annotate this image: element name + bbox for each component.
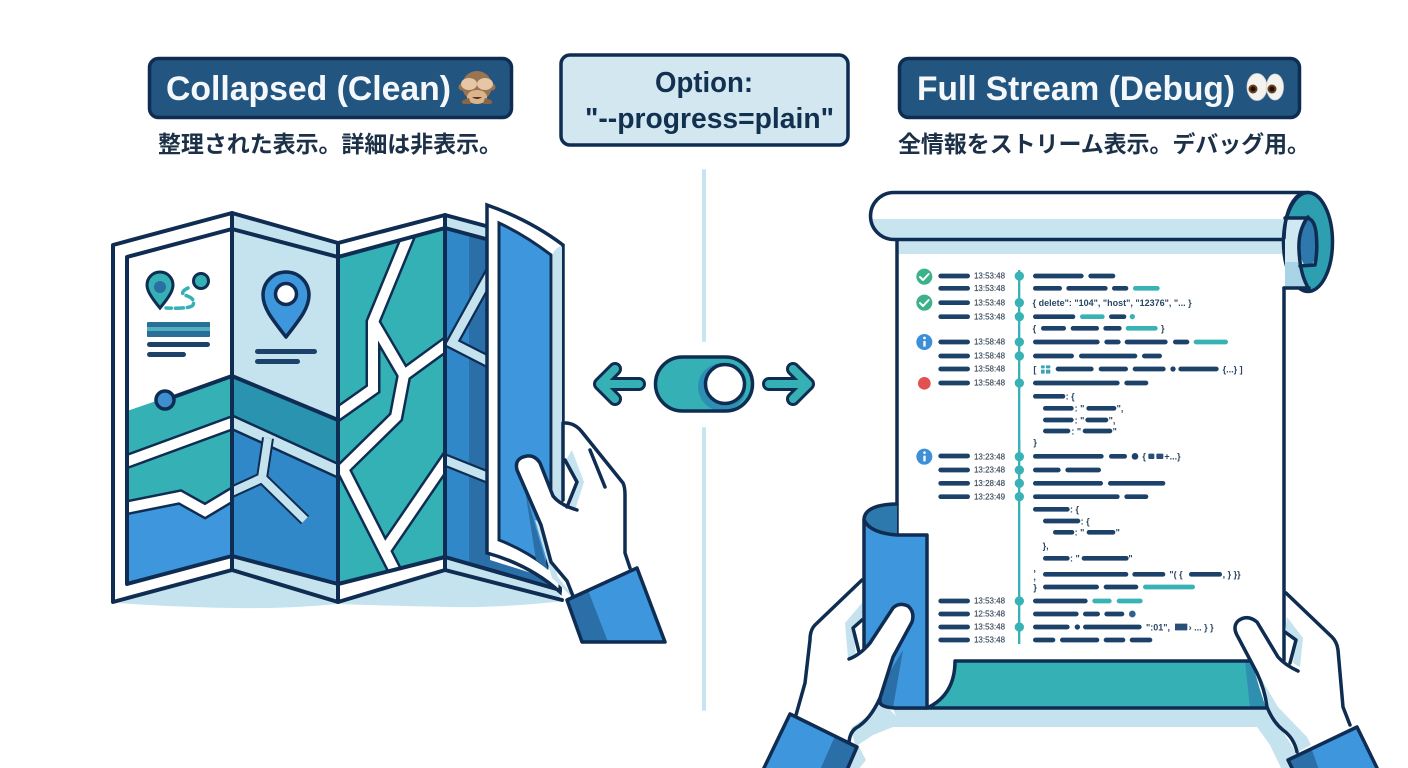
roll end	[1284, 192, 1332, 292]
scroll paper	[897, 238, 1283, 708]
log lines	[1033, 276, 1243, 448]
log lines: : {	[1081, 516, 1090, 526]
left finger shadow	[845, 603, 862, 658]
scroll bottom shadow	[893, 708, 1272, 727]
log lines: : {	[1070, 505, 1079, 515]
left hand	[796, 580, 913, 745]
log lines	[1033, 452, 1241, 640]
log lines: +...}	[1164, 452, 1181, 462]
map panel 2	[234, 232, 336, 582]
map pin small	[147, 272, 208, 308]
arrow: left	[600, 369, 639, 399]
timeline rail	[1015, 270, 1024, 460]
scroll illustration	[763, 192, 1378, 768]
log lines: ",	[1109, 415, 1115, 425]
log lines: {	[1142, 452, 1146, 462]
log lines: "	[1113, 426, 1117, 436]
subtitle: full stream description: 全情報をストリーム表示。デバッグ用。	[898, 131, 1310, 157]
sleeve left panel	[567, 568, 665, 642]
hand holding fold	[516, 423, 630, 600]
log lines: "( {	[1169, 570, 1183, 580]
log lines: { delete": "104", "host", "12376", "... }	[1033, 298, 1192, 308]
map pin large	[263, 272, 309, 337]
arrow: right	[769, 369, 808, 399]
toggle switch	[656, 357, 752, 411]
status icon: success	[916, 269, 932, 285]
left sleeve	[763, 714, 857, 768]
timestamps: 13:23:48	[974, 452, 1006, 461]
log lines: ",	[1117, 404, 1123, 414]
map panel 4	[447, 230, 490, 568]
timestamps: 13:23:48	[974, 466, 1006, 475]
top roll body	[870, 192, 1308, 254]
left paper curl	[864, 504, 927, 708]
fold flap	[487, 205, 563, 592]
map location dot	[156, 391, 174, 409]
finger shadow	[566, 450, 584, 510]
folded map illustration	[113, 205, 665, 642]
log content: lower	[916, 440, 1241, 645]
log lines: ,	[1033, 572, 1036, 582]
center divider	[702, 169, 706, 711]
log lines: },	[1043, 541, 1049, 551]
log lines: "	[1116, 528, 1120, 538]
header label: Full Stream (Debug): Full Stream (Debug)	[917, 70, 1235, 108]
status icon: success	[916, 295, 932, 311]
header label: Collapsed (Clean): Collapsed (Clean)	[166, 70, 451, 108]
timestamps: 13:53:48	[974, 623, 1006, 632]
map legend lines left	[147, 322, 210, 357]
status icon: error	[918, 377, 931, 390]
header: Full Stream (Debug)	[900, 58, 1300, 118]
timestamps: 12:53:48	[974, 610, 1006, 619]
bottom roll band	[895, 661, 1268, 708]
map ground shadow	[118, 570, 565, 608]
timestamps: 13:53:48	[974, 298, 1006, 307]
map panel 3	[340, 230, 443, 582]
timestamps: 13:53:48	[974, 272, 1006, 281]
log lines: : "	[1071, 426, 1081, 436]
option box	[561, 55, 848, 145]
log lines: , } }}	[1223, 570, 1241, 580]
icon: see-no-evil monkey	[458, 71, 496, 104]
log lines: ":01",	[1146, 622, 1170, 632]
timestamps: 13:23:49	[974, 492, 1006, 501]
log lines: {	[1033, 324, 1037, 334]
log lines: › ... } }	[1189, 622, 1214, 632]
map legend lines center	[255, 349, 317, 364]
log lines: : {	[1066, 392, 1075, 402]
log lines: }	[1161, 324, 1165, 334]
right sleeve	[1288, 727, 1378, 768]
timestamps: 13:53:48	[974, 312, 1006, 321]
timestamps: 13:58:48	[974, 352, 1006, 361]
timestamps: 13:58:48	[974, 338, 1006, 347]
log lines: ,	[1033, 564, 1036, 574]
log lines: : "	[1075, 415, 1084, 425]
right hand	[1235, 593, 1350, 752]
map lower fold shade	[490, 560, 562, 592]
log lines: }	[1033, 582, 1037, 592]
log lines: : "	[1070, 554, 1080, 564]
timeline rail	[1015, 440, 1024, 644]
timestamps: 13:58:48	[974, 379, 1006, 388]
log lines: {...} ]	[1223, 365, 1243, 375]
status icon: info	[916, 449, 932, 465]
right hand outer shadow	[1257, 708, 1296, 768]
header: Collapsed (Clean)	[150, 58, 512, 118]
map panel 1	[129, 378, 230, 582]
log lines: : "	[1075, 528, 1084, 538]
map strips	[232, 213, 560, 602]
timestamps: 13:53:48	[974, 636, 1006, 645]
timestamps	[941, 272, 1006, 388]
status icon: info	[916, 334, 932, 350]
icon: eyes	[1247, 74, 1284, 100]
map outlines	[113, 213, 562, 602]
log content: upper	[916, 269, 1243, 460]
timestamps: 13:53:48	[974, 597, 1006, 606]
log lines: : "	[1075, 404, 1084, 414]
timestamps: 13:53:48	[974, 284, 1006, 293]
option label: Option:	[655, 67, 753, 99]
log lines: "	[1128, 554, 1133, 564]
log lines: [	[1033, 365, 1036, 375]
log lines: }	[1033, 438, 1037, 448]
option value: "--progress=plain"	[585, 103, 834, 135]
left hand outer shadow	[846, 700, 905, 768]
timestamps: 13:28:48	[974, 479, 1006, 488]
map paper frame	[113, 213, 560, 602]
subtitle: collapsed description: 整理された表示。詳細は非表示。	[158, 131, 502, 157]
right hand inner shadows	[1259, 617, 1311, 752]
timestamps: 13:58:48	[974, 365, 1006, 374]
scroll paper outlines	[897, 238, 1284, 660]
timestamps	[941, 452, 1006, 645]
